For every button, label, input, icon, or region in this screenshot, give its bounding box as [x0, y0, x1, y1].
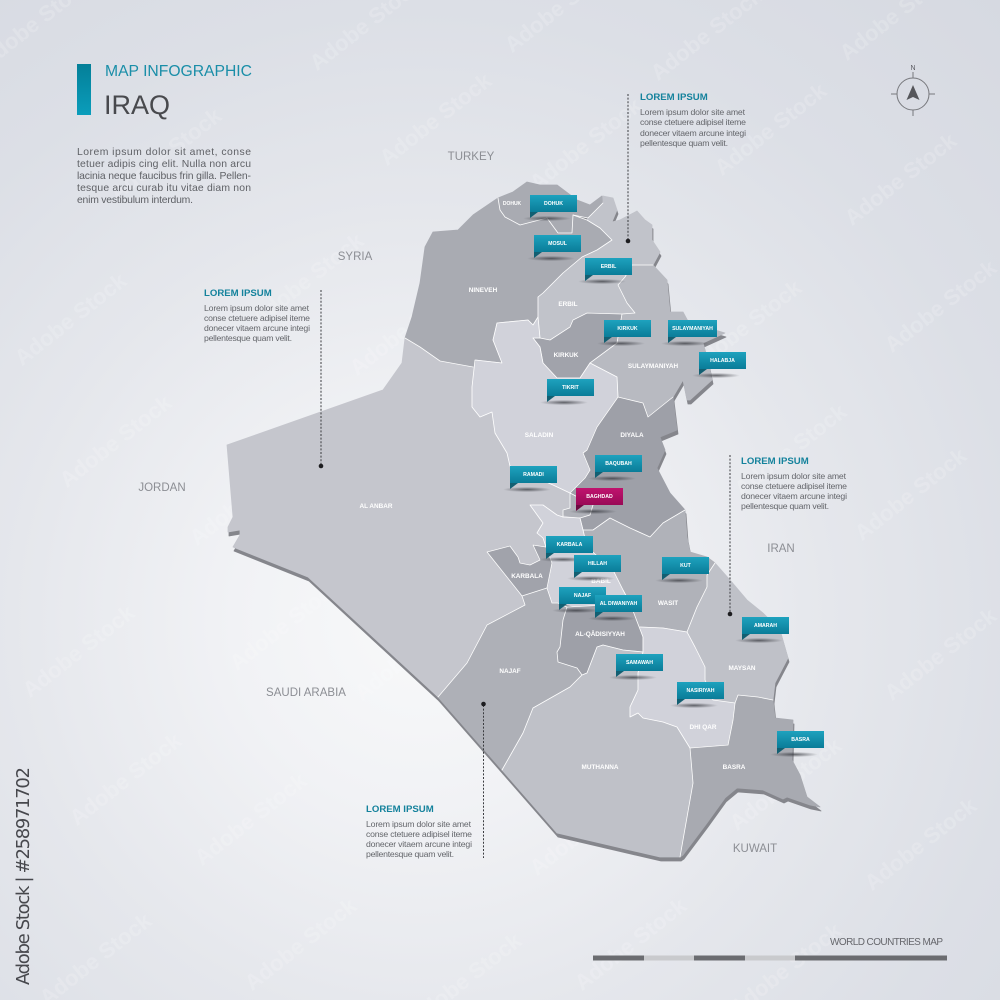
callout: right: conse ctetuere adipisel iteme	[741, 481, 847, 491]
flag: Sulaymaniyah: SULAYMANIYAH	[672, 326, 713, 332]
callout: bottom	[366, 702, 486, 859]
watermarks: Adobe Stock	[525, 777, 647, 880]
intro paragraph	[77, 147, 251, 206]
icon: compass: N	[910, 65, 916, 72]
watermarks: Adobe Stock	[18, 599, 140, 702]
Sulaymaniyah	[590, 265, 725, 417]
city flags	[503, 195, 824, 757]
flag: Nasiriyah	[670, 682, 724, 708]
intro paragraph: enim vestibulum interdum.	[77, 195, 193, 206]
callout: left: LOREM IPSUM	[204, 288, 272, 299]
province labels: AL-QĀDISIYYAH	[575, 630, 625, 638]
Dhi Qar	[630, 627, 735, 748]
flag: Kut	[655, 557, 709, 583]
watermarks: Adobe Stock	[225, 572, 347, 675]
watermarks: Adobe Stock	[880, 254, 1000, 357]
province labels: KARBALA	[511, 573, 543, 580]
callout: bottom: pellentesque quam velit.	[366, 849, 454, 859]
province labels: ERBIL	[558, 301, 578, 308]
watermarks: Adobe Stock	[545, 572, 667, 675]
watermarks: Adobe Stock	[350, 602, 472, 705]
flag: Samawah: SAMAWAH	[626, 660, 653, 666]
Nineveh	[405, 198, 612, 367]
flag: Baqubah	[588, 455, 642, 481]
flag: Al Diwaniyah	[588, 595, 642, 621]
flag: Erbil: ERBIL	[601, 264, 617, 270]
Saladin	[472, 317, 618, 493]
callout: top right: LOREM IPSUM	[640, 92, 708, 103]
province labels: SALADIN	[525, 432, 554, 439]
flag: Baghdad: BAGHDAD	[586, 494, 613, 500]
province labels: BABIL	[591, 578, 611, 585]
main title: IRAQ	[104, 90, 170, 120]
flag: Baghdad	[569, 488, 623, 514]
flag: Hillah	[567, 555, 621, 581]
callout: bottom: conse ctetuere adipisel iteme	[366, 829, 472, 839]
watermarks: Adobe Stock	[860, 792, 982, 895]
callout: left: donecer vitaem arcune integi	[204, 323, 310, 333]
watermarks: Adobe Stock	[387, 402, 509, 505]
watermarks: Adobe Stock	[65, 727, 187, 830]
callout: right: LOREM IPSUM	[741, 456, 809, 467]
country labels: SAUDI ARABIA	[266, 687, 346, 699]
Dohuk	[498, 182, 603, 233]
watermarks: Adobe Stock	[105, 102, 227, 205]
province labels: AL ANBAR	[359, 503, 393, 510]
callout: top right: Lorem ipsum dolor site amet	[640, 107, 746, 117]
callout: left: conse ctetuere adipisel iteme	[204, 313, 310, 323]
province labels: NAJAF	[499, 668, 521, 675]
flag: Kirkuk	[597, 320, 651, 346]
flag: Dohuk: DOHUK	[544, 201, 563, 207]
callout: right: Lorem ipsum dolor site amet	[741, 471, 847, 481]
watermarks: Adobe Stock	[10, 267, 132, 370]
callout: right: donecer vitaem arcune integi	[741, 491, 847, 501]
flag: Basra	[770, 731, 824, 757]
province labels: MUTHANNA	[582, 764, 619, 771]
Basra	[680, 695, 820, 857]
flag: Karbala	[539, 536, 593, 562]
callout: top right	[626, 92, 746, 243]
Baghdad	[563, 493, 593, 518]
flag: Ramadi: RAMADI	[523, 472, 544, 478]
Diyala	[570, 397, 685, 537]
watermarks: Adobe Stock	[685, 274, 807, 377]
flag: Ramadi	[503, 466, 557, 492]
callout: top right: pellentesque quam velit.	[640, 138, 728, 148]
callout: bottom: donecer vitaem arcune integi	[366, 839, 472, 849]
province labels: NINEVEH	[469, 287, 498, 294]
Muthanna	[502, 645, 693, 857]
Babil	[530, 505, 630, 607]
province labels: BASRA	[723, 764, 746, 771]
Wasit	[583, 510, 715, 632]
country labels: JORDAN	[138, 482, 186, 494]
flag: Amarah	[735, 617, 789, 643]
watermarks: Adobe Stock	[880, 602, 1000, 705]
watermarks: Adobe Stock	[185, 447, 307, 550]
flag: Tikrit	[540, 379, 594, 405]
watermarks: Adobe Stock	[190, 767, 312, 870]
flag: Karbala: KARBALA	[557, 542, 583, 548]
flag: Tikrit: TIKRIT	[562, 385, 580, 391]
flag: Dohuk	[523, 195, 577, 221]
intro paragraph: tesque arcu curab itu vitae diam non	[77, 183, 251, 194]
province labels: WASIT	[658, 600, 678, 607]
flag: Mosul: MOSUL	[548, 241, 568, 247]
province labels	[359, 201, 756, 771]
flag: Samawah	[609, 654, 663, 680]
watermarks: Adobe Stock	[375, 67, 497, 170]
Karbala	[487, 545, 552, 596]
watermarks: Adobe Stock	[525, 92, 647, 195]
flag: Halabja	[692, 352, 746, 378]
province labels: MAYSAN	[728, 665, 756, 672]
intro paragraph: tetuer adipis cing elit. Nulla non arcu	[77, 159, 251, 170]
scale bar with caption: WORLD COUNTRIES MAP	[830, 937, 943, 948]
country labels	[138, 151, 795, 855]
province labels: DOHUK	[503, 201, 522, 207]
flag: Erbil	[578, 258, 632, 284]
province labels: KIRKUK	[554, 352, 579, 359]
watermarks: Adobe Stock	[710, 77, 832, 180]
watermarks: Adobe Stock	[850, 442, 972, 545]
watermarks: Adobe Stock	[570, 892, 692, 995]
accent bar	[77, 64, 91, 115]
watermarks: Adobe Stock	[55, 389, 177, 492]
intro paragraph: Lorem ipsum dolor sit amet, conse	[77, 147, 251, 158]
flag: Sulaymaniyah	[661, 320, 717, 346]
Al-Qadisiyyah	[557, 603, 643, 675]
stock id side text: Adobe Stock | #258971702	[13, 767, 34, 985]
watermarks: Adobe Stock	[247, 227, 369, 330]
icon: compass	[891, 65, 935, 116]
callout: left	[204, 288, 323, 468]
callout: left: Lorem ipsum dolor site amet	[204, 303, 310, 313]
country labels: IRAN	[767, 543, 795, 555]
Maysan	[687, 563, 788, 703]
watermarks: Adobe Stock	[840, 127, 962, 230]
province fills	[227, 182, 820, 857]
province borders	[405, 198, 773, 857]
subtitle: MAP INFOGRAPHIC	[105, 63, 252, 80]
callout: left: pellentesque quam velit.	[204, 333, 292, 343]
callout: right	[728, 455, 847, 616]
flag: Najaf	[552, 587, 606, 613]
Erbil	[538, 196, 660, 340]
flag: Kut: KUT	[680, 563, 692, 569]
country labels: TURKEY	[448, 151, 495, 163]
flag: Basra: BASRA	[791, 737, 810, 743]
map of Iraq	[227, 182, 820, 857]
callout: bottom: Lorem ipsum dolor site amet	[366, 819, 472, 829]
province labels: DIYALA	[620, 432, 644, 439]
intro paragraph: lacinia neque faucibus frin gilla. Pellen-	[77, 171, 251, 182]
flag: Kirkuk: KIRKUK	[617, 326, 638, 332]
flag: Hillah: HILLAH	[588, 561, 607, 567]
flag: Amarah: AMARAH	[754, 623, 777, 629]
flag: Nasiriyah: NASIRIYAH	[686, 688, 715, 694]
watermarks: Adobe Stock	[730, 398, 852, 501]
Al Anbar	[227, 338, 580, 697]
flag: Najaf: NAJAF	[574, 593, 591, 599]
watermarks: Adobe Stock	[345, 277, 467, 380]
Najaf	[438, 588, 582, 770]
flag: Halabja: HALABJA	[710, 358, 735, 364]
country labels: SYRIA	[338, 251, 373, 263]
province labels: SULAYMANIYAH	[628, 363, 679, 370]
callout: bottom: LOREM IPSUM	[366, 804, 434, 815]
scale bar with caption	[593, 937, 947, 960]
flag: Baqubah: BAQUBAH	[605, 461, 632, 467]
callout: top right: conse ctetuere adipisel iteme	[640, 117, 746, 127]
flag: Al Diwaniyah: AL DIWANIYAH	[600, 601, 637, 607]
watermarks: Adobe Stock	[725, 732, 847, 835]
watermarks: Adobe Stock	[240, 892, 362, 995]
country labels: KUWAIT	[733, 843, 777, 855]
province labels: DHI QAR	[690, 724, 717, 731]
Kirkuk	[533, 313, 622, 378]
flag: Mosul	[527, 235, 581, 261]
callout: top right: donecer vitaem arcune integi	[640, 128, 746, 138]
title block	[77, 63, 252, 120]
callout: right: pellentesque quam velit.	[741, 501, 829, 511]
